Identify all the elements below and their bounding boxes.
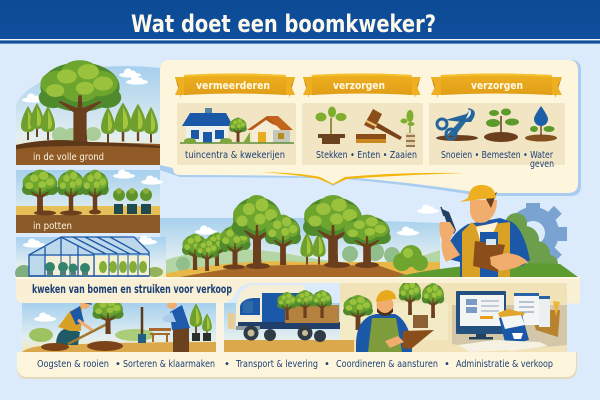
activity labels: Transport & levering xyxy=(235,359,318,370)
clipboard xyxy=(473,239,505,272)
banner text: kweken van bomen en struiken voor verkoop xyxy=(32,282,232,296)
activity labels xyxy=(37,359,553,370)
activity labels: • xyxy=(324,359,330,370)
ribbon: verzorgen 1 xyxy=(303,74,421,98)
icon: sprout xyxy=(400,110,415,147)
ribbon: verzorgen 2: verzorgen xyxy=(471,80,523,92)
worker digging xyxy=(41,298,124,351)
ribbon: vermeerderen xyxy=(175,74,295,98)
icon: gavel xyxy=(356,109,402,143)
ribbon: verzorgen 2 xyxy=(431,74,562,98)
greenhouse scene xyxy=(15,236,166,281)
worker sorting xyxy=(138,298,212,352)
activity labels: Administratie & verkoop xyxy=(456,359,553,370)
caption: in potten xyxy=(33,221,72,232)
ribbon: vermeerderen: vermeerderen xyxy=(196,80,270,92)
card: snoeien bemesten water geven: geven xyxy=(530,159,554,170)
icon: pruning shears xyxy=(436,108,478,141)
activity labels: • xyxy=(115,359,121,370)
radio xyxy=(441,207,456,234)
label: Snoeien • Bemesten • Water xyxy=(441,150,554,161)
trees xyxy=(182,195,578,277)
title: Wat doet een boomkweker? xyxy=(131,10,436,38)
ribbon: verzorgen 1: verzorgen xyxy=(333,80,385,92)
large tree xyxy=(39,60,121,142)
greenhouse xyxy=(29,237,149,276)
header banner xyxy=(0,0,600,44)
activity labels: Sorteren & klaarmaken xyxy=(123,359,215,370)
card: tuincentra en kwekerijen xyxy=(177,103,296,165)
coordinator with clipboard xyxy=(343,280,444,352)
computer and shopping icon xyxy=(452,291,567,352)
banner: kweken van bomen en struiken xyxy=(16,277,580,304)
activity labels: • xyxy=(444,359,450,370)
caption: in de volle grond xyxy=(33,152,104,163)
card: snoeien bemesten water geven xyxy=(429,103,565,170)
bushes behind worker xyxy=(505,213,558,273)
activity labels: Oogsten & rooien xyxy=(37,359,109,370)
icon: seedling in pot xyxy=(316,106,346,144)
panel: bottom activities xyxy=(17,280,577,379)
central landscape scene xyxy=(150,195,578,277)
activity labels: Coordineren & aansturen xyxy=(336,359,438,370)
icon: water drop and sprout xyxy=(525,106,557,142)
delivery truck xyxy=(228,285,340,342)
icon: plant in soil xyxy=(484,108,519,142)
label: Stekken • Enten • Zaaien xyxy=(316,150,417,161)
activity labels: • xyxy=(224,359,230,370)
panel: main callout with three tasks xyxy=(160,60,581,196)
label: tuincentra & kwekerijen xyxy=(185,150,285,161)
panel: in potten xyxy=(16,170,163,233)
main figure: nursery worker with radio and clipboard xyxy=(439,185,530,277)
icon: garden centre and house xyxy=(180,108,294,144)
panel: in de volle grond xyxy=(16,60,160,165)
icon: gear xyxy=(507,203,567,262)
card: stekken enten zaaien xyxy=(302,103,423,165)
